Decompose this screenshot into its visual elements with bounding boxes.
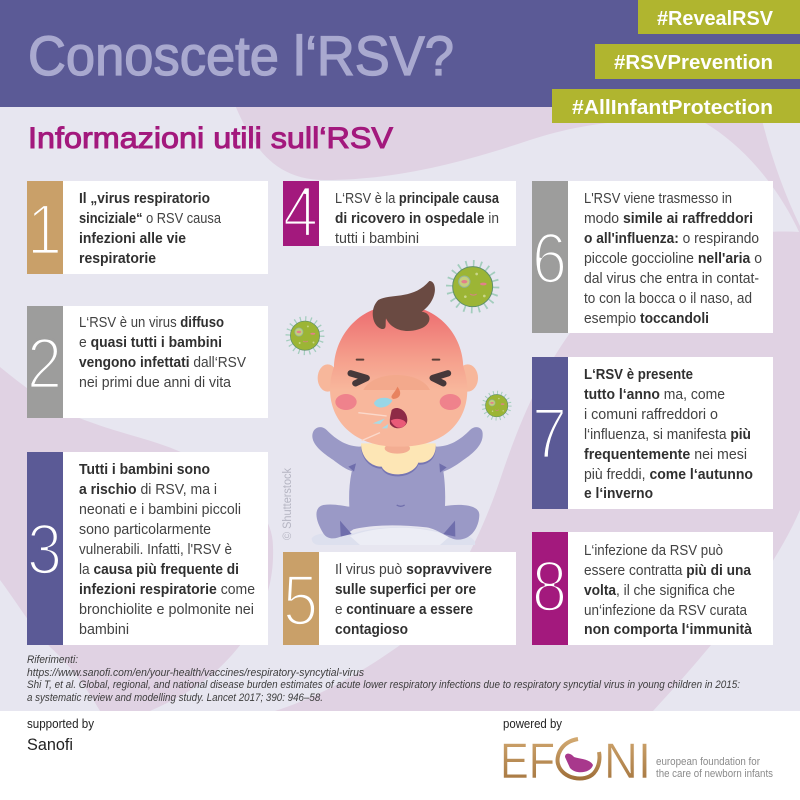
panel: fact 6 xyxy=(532,181,773,333)
panel: fact 7: e l‘inverno xyxy=(584,486,653,502)
panel: fact 1 xyxy=(27,181,268,274)
supported by xyxy=(27,717,95,754)
panel: fact 3: bambini xyxy=(79,622,129,638)
powered by EFCNI logo: EF xyxy=(500,733,555,789)
panel: fact 4: L‘RSV è la principale causa xyxy=(335,191,500,207)
nose shadow band xyxy=(363,375,430,390)
supported by: Sanofi xyxy=(27,735,73,754)
header band xyxy=(0,0,800,107)
powered by EFCNI logo: european foundation for xyxy=(656,756,760,768)
references: a systematic review and modelling study. Lancet 2017; 390: 946–58. xyxy=(27,692,323,704)
panel: fact 2: vengono infettati dall‘RSV xyxy=(79,355,246,371)
hashtag: AllInfantProtection xyxy=(552,89,800,123)
panel: fact 8: 8 xyxy=(532,548,567,627)
illustration: sick baby with viruses xyxy=(288,263,510,545)
panel: fact 4: tutti i bambini xyxy=(335,231,419,247)
panel: fact 7: tutto l‘anno ma, come xyxy=(584,387,725,403)
baby cheeks xyxy=(335,394,357,410)
panel: fact 6: dal virus che entra in contat- xyxy=(584,271,759,287)
baby body shading xyxy=(340,463,455,537)
image credit: © Shutterstock xyxy=(282,468,294,540)
panel: fact 3: neonati e i bambini piccoli xyxy=(79,502,241,518)
panel: fact 1: infezioni alle vie xyxy=(79,231,186,247)
hashtag: RevealRSV xyxy=(638,0,800,34)
powered by EFCNI logo: powered by xyxy=(503,717,563,731)
panel: fact 3: infezioni respiratorie come xyxy=(79,582,255,598)
panel: fact 3: a rischio di RSV, ma i xyxy=(79,482,217,498)
panel: fact 3: vulnerabili. Infatti, l'RSV è xyxy=(79,542,232,558)
baby nose xyxy=(392,387,400,399)
mucus and sneeze spray xyxy=(374,398,392,407)
panel: fact 5: 5 xyxy=(283,562,318,641)
panel: fact 5: Il virus può sopravvivere xyxy=(335,562,492,578)
panel: fact 6: o all'influenza: o respirando xyxy=(584,231,759,247)
references: Riferimenti: xyxy=(27,654,78,666)
icon: virus left xyxy=(288,319,322,353)
panel: fact 8: non comporta l‘immunità xyxy=(584,622,753,638)
baby mouth xyxy=(390,408,407,428)
references: https://www.sanofi.com/en/your-health/vaccines/respiratory-syncytial-virus xyxy=(27,667,364,679)
panel: fact 3: 3 xyxy=(27,511,62,590)
panel: fact 3: la causa più frequente di xyxy=(79,562,239,578)
panel: fact 7: l‘influenza, si manifesta più xyxy=(584,427,751,443)
title: Conoscete l‘RSV? xyxy=(28,24,454,87)
icon: virus right xyxy=(484,393,510,419)
panel: fact 1: Il „virus respiratorio xyxy=(79,191,210,207)
panel: fact 5: contagioso xyxy=(335,622,408,638)
supported by: supported by xyxy=(27,717,95,731)
panel: fact 6: modo simile ai raffreddori xyxy=(584,211,753,227)
panel: fact 3: sono particolarmente xyxy=(79,522,211,538)
panel: fact 2: nei primi due anni di vita xyxy=(79,375,232,391)
panel: fact 3: bronchiolite e polmonite nei xyxy=(79,602,254,618)
panel: fact 8: un‘infezione da RSV curata xyxy=(584,603,748,619)
hashtag: RSVPrevention: #RSVPrevention xyxy=(614,52,773,74)
panel: fact 1: 1 xyxy=(27,191,62,270)
references xyxy=(27,654,740,704)
panel: fact 7: L‘RSV è presente xyxy=(584,367,693,383)
panel: fact 8: L‘infezione da RSV può xyxy=(584,543,723,559)
hashtag: RevealRSV: #RevealRSV xyxy=(657,8,774,30)
panel: fact 6: to con la bocca o il naso, ad xyxy=(584,291,752,307)
panel: fact 6: 6 xyxy=(532,220,567,299)
panel: fact 7: i comuni raffreddori o xyxy=(584,407,718,423)
panel: fact 5 xyxy=(283,552,516,645)
baby closed eyes xyxy=(351,373,448,383)
background swirl shapes xyxy=(0,105,800,711)
panel: fact 7: più freddi, come l‘autunno xyxy=(584,467,753,483)
panel: fact 1: sinciziale“ o RSV causa xyxy=(79,211,222,227)
hashtag: RSVPrevention xyxy=(595,44,800,79)
panel: fact 7: 7 xyxy=(532,395,567,474)
footer background xyxy=(0,711,800,800)
subtitle: Informazioni utili sull‘RSV xyxy=(28,122,393,155)
baby floor shadow xyxy=(312,527,475,545)
panel: fact 6: L'RSV viene trasmesso in xyxy=(584,191,732,207)
powered by EFCNI logo: NI xyxy=(604,733,651,789)
baby bib xyxy=(361,443,436,474)
panel: fact 2: L‘RSV è un virus diffuso xyxy=(79,315,224,331)
panel: fact 3: Tutti i bambini sono xyxy=(79,462,210,478)
baby chin xyxy=(385,443,410,454)
baby eyebrows xyxy=(357,357,439,363)
powered by EFCNI logo: the care of newborn infants xyxy=(656,768,773,780)
panel: fact 2: e quasi tutti i bambini xyxy=(79,335,222,351)
panel: fact 6: piccole goccioline nell'aria o xyxy=(584,251,762,267)
panel: fact 3 xyxy=(27,452,268,645)
references: Shi T, et al. Global, regional, and national disease burden estimates of acute lower respiratory infections due to respiratory syncytial virus in young children in 2015: xyxy=(27,679,740,691)
baby hair xyxy=(373,281,435,331)
panel: fact 8: volta, il che significa che xyxy=(584,583,735,599)
icon: virus top right xyxy=(449,263,496,310)
panel: fact 8 xyxy=(532,532,773,645)
panel: fact 8: essere contratta più di una xyxy=(584,563,752,579)
powered by EFCNI logo xyxy=(500,717,773,789)
panel: fact 1: respiratorie xyxy=(79,251,156,267)
panel: fact 7: frequentemente nei mesi xyxy=(584,447,747,463)
panel: fact 4: di ricovero in ospedale in xyxy=(335,211,499,227)
baby ears xyxy=(318,364,338,392)
panel: fact 5: e continuare a essere xyxy=(335,602,473,618)
hashtag: AllInfantProtection: #AllInfantProtection xyxy=(572,97,773,119)
panel: fact 2 xyxy=(27,306,268,418)
panel: fact 4: 4 xyxy=(283,173,318,252)
panel: fact 7 xyxy=(532,357,773,509)
baby body xyxy=(312,427,483,540)
panel: fact 2: 2 xyxy=(27,325,62,404)
panel: fact 6: esempio toccandoli xyxy=(584,311,709,327)
panel: fact 4 xyxy=(283,173,516,252)
panel: fact 5: sulle superfici per ore xyxy=(335,582,476,598)
baby collar trim xyxy=(361,445,436,476)
baby head xyxy=(330,305,467,447)
